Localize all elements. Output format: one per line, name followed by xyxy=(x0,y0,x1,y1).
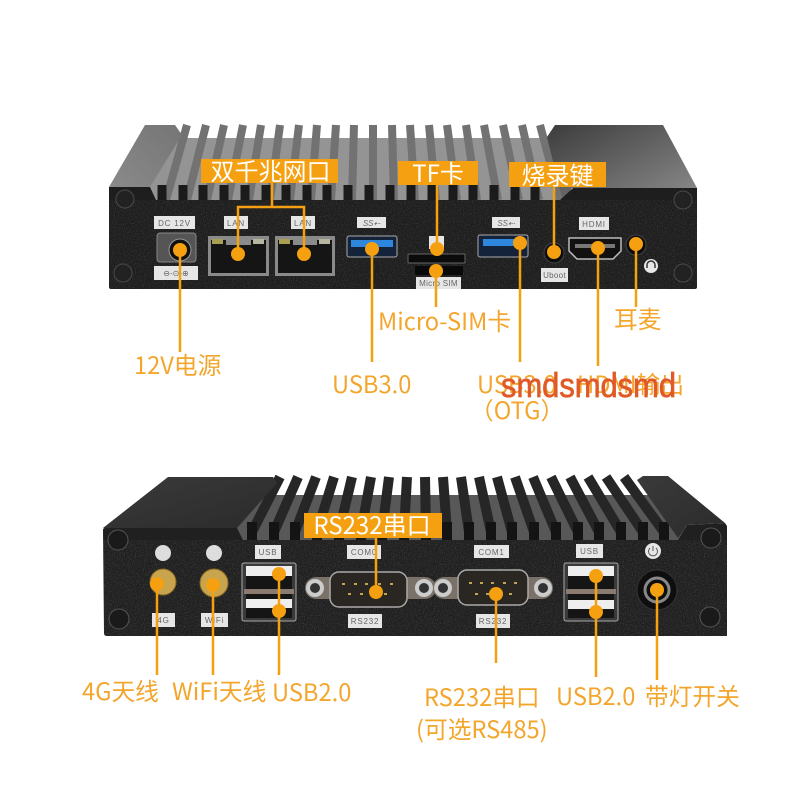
port: USB 2.0 right: USB xyxy=(580,547,599,556)
port: DC 12V: DC 12V xyxy=(158,219,191,228)
port: USB 2.0 right xyxy=(564,544,618,621)
antenna WiFi connector xyxy=(200,545,228,627)
port: DC 12V: ⊖-⊙-⊕ xyxy=(163,269,189,278)
leader dots: top device xyxy=(173,236,643,278)
tag: TF card: TF卡 xyxy=(412,154,464,189)
port: USB 3.0 xyxy=(347,217,397,257)
leader lines: top device xyxy=(180,183,636,366)
port: COM1 serial xyxy=(433,545,553,628)
right shoulder, bottom device xyxy=(637,476,725,538)
tag: dual gigabit LAN: 双千兆网口 xyxy=(210,152,330,187)
label: USB2.0 left: USB2.0 xyxy=(272,674,351,708)
heatsink fins, bottom device xyxy=(225,477,700,541)
tag: burn key: 烧录键 xyxy=(522,156,594,191)
port: headphone jack xyxy=(626,235,658,273)
port: TF and Micro SIM slots: Micro SIM xyxy=(419,279,458,288)
front panel, bottom device xyxy=(103,523,727,636)
left shoulder, top device xyxy=(109,125,182,187)
label: HDMI output: HDMI输出 xyxy=(577,366,684,400)
label: Micro-SIM card: Micro-SIM卡 xyxy=(378,303,511,337)
heatsink fins, top device xyxy=(140,125,565,201)
watermark text: smdsmdsmd xyxy=(501,367,676,405)
port: Uboot button xyxy=(541,243,568,282)
callouts: top device xyxy=(134,152,684,426)
port: HDMI: HDMI xyxy=(582,220,606,229)
port: COM0 serial xyxy=(305,545,436,628)
left shoulder, bottom device xyxy=(103,477,277,528)
tag: TF card xyxy=(398,154,478,189)
label: 12V power: 12V电源 xyxy=(134,347,221,381)
label: headset: 耳麦 xyxy=(614,301,661,335)
front panel, top device xyxy=(109,187,697,289)
port: HDMI xyxy=(569,217,621,259)
port: USB 3.0: SS⇠ xyxy=(363,219,380,228)
port: COM1 serial: COM1 xyxy=(478,548,505,557)
panel: bottom device front view xyxy=(103,476,727,636)
tag: RS232 serial: RS232串口 xyxy=(313,506,431,541)
label: WiFi antenna: WiFi天线 xyxy=(172,673,266,707)
label: lit power switch: 带灯开关 xyxy=(645,678,740,712)
leader dots: bottom device xyxy=(150,567,664,619)
port: Uboot button: Uboot xyxy=(543,271,566,280)
port: USB 3.0 OTG xyxy=(478,217,528,257)
antenna WiFi connector: WiFi xyxy=(205,616,224,625)
label: 4G antenna: 4G天线 xyxy=(82,673,159,707)
label: USB3.0 OTG: USB3.0 xyxy=(477,366,556,400)
right shoulder, top device xyxy=(547,125,697,202)
label: USB3.0: USB3.0 xyxy=(332,366,411,400)
antenna 4G connector: 4G xyxy=(157,616,170,625)
screws, bottom device xyxy=(108,528,721,629)
label: USB2.0 right: USB2.0 xyxy=(556,678,635,712)
label: USB3.0 OTG xyxy=(470,366,564,426)
port: TF and Micro SIM slots xyxy=(408,236,465,289)
power button with light xyxy=(637,543,677,610)
port: COM0 serial: RS232 xyxy=(351,617,379,626)
panel: top device rear view xyxy=(109,125,697,289)
label: RS232 serial, optional RS485: RS232串口 xyxy=(424,679,540,713)
port: USB 3.0 OTG: SS⇠ xyxy=(497,219,515,228)
label: RS232 serial, optional RS485 xyxy=(416,679,548,745)
port: DC 12V xyxy=(154,216,198,280)
port: LAN 1: LAN xyxy=(227,219,245,228)
port: USB 2.0 left xyxy=(242,545,296,621)
label: USB3.0 OTG: （OTG） xyxy=(470,392,564,426)
port: COM0 serial: COM0 xyxy=(351,548,377,557)
label: RS232 serial, optional RS485: (可选RS485) xyxy=(416,711,548,745)
antenna 4G connector xyxy=(150,545,176,627)
port: LAN 1 xyxy=(208,216,269,276)
screws, top device xyxy=(114,190,692,282)
port: LAN 2: LAN xyxy=(294,219,312,228)
port: COM1 serial: RS232 xyxy=(479,617,507,626)
callouts: bottom device xyxy=(82,506,740,745)
leader lines: bottom device xyxy=(157,538,657,680)
port: USB 2.0 left: USB xyxy=(259,548,277,557)
port: LAN 2 xyxy=(275,216,335,276)
